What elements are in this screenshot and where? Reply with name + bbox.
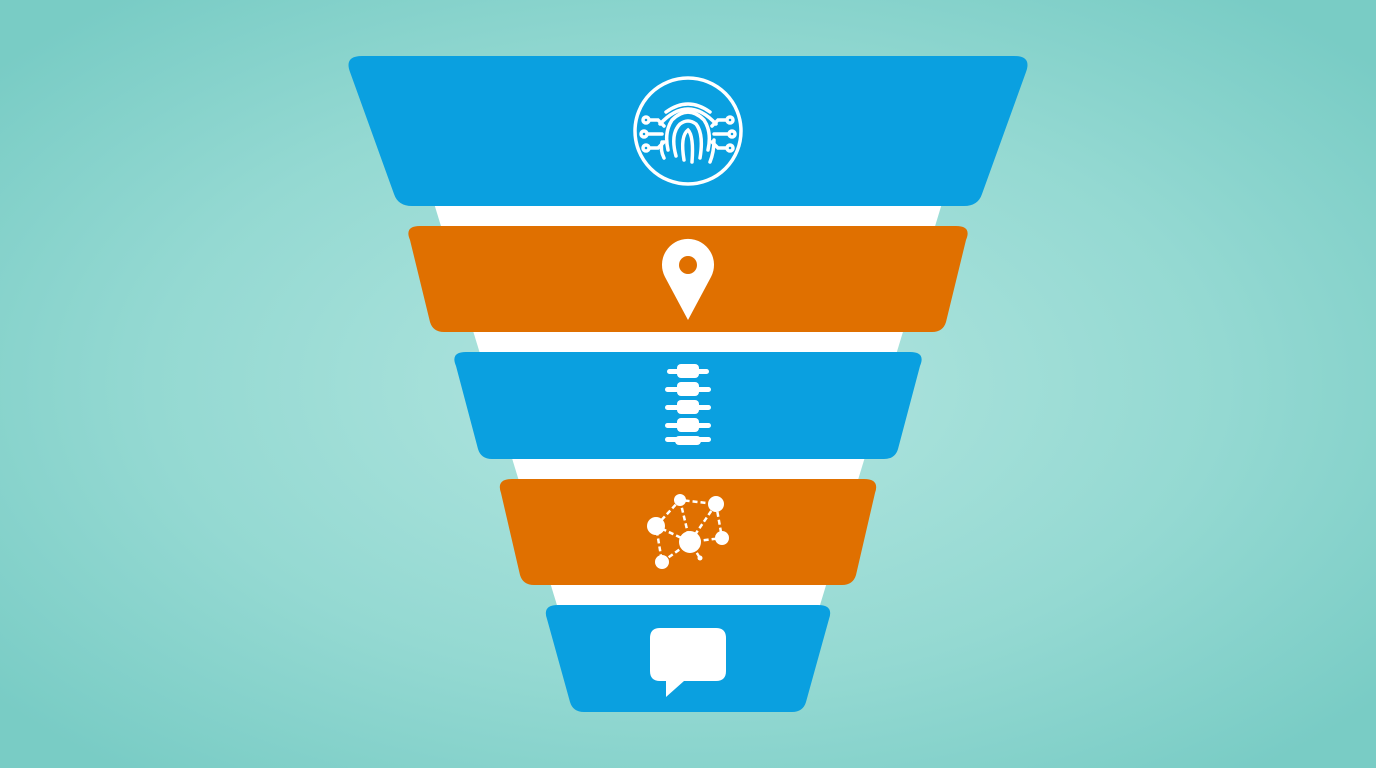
band 5: chat [546, 605, 830, 712]
band 4: network [500, 479, 876, 585]
icon: fingerprint [635, 78, 741, 184]
icon: network nodes [656, 500, 722, 562]
band 3: spine [454, 352, 922, 459]
band 1: fingerprint [348, 56, 1028, 206]
funnel white backing [433, 200, 943, 615]
band 2: location pin [408, 226, 968, 332]
icon: map pin [662, 239, 714, 320]
icon: spine [665, 364, 711, 445]
icon: chat bubble [650, 628, 726, 697]
